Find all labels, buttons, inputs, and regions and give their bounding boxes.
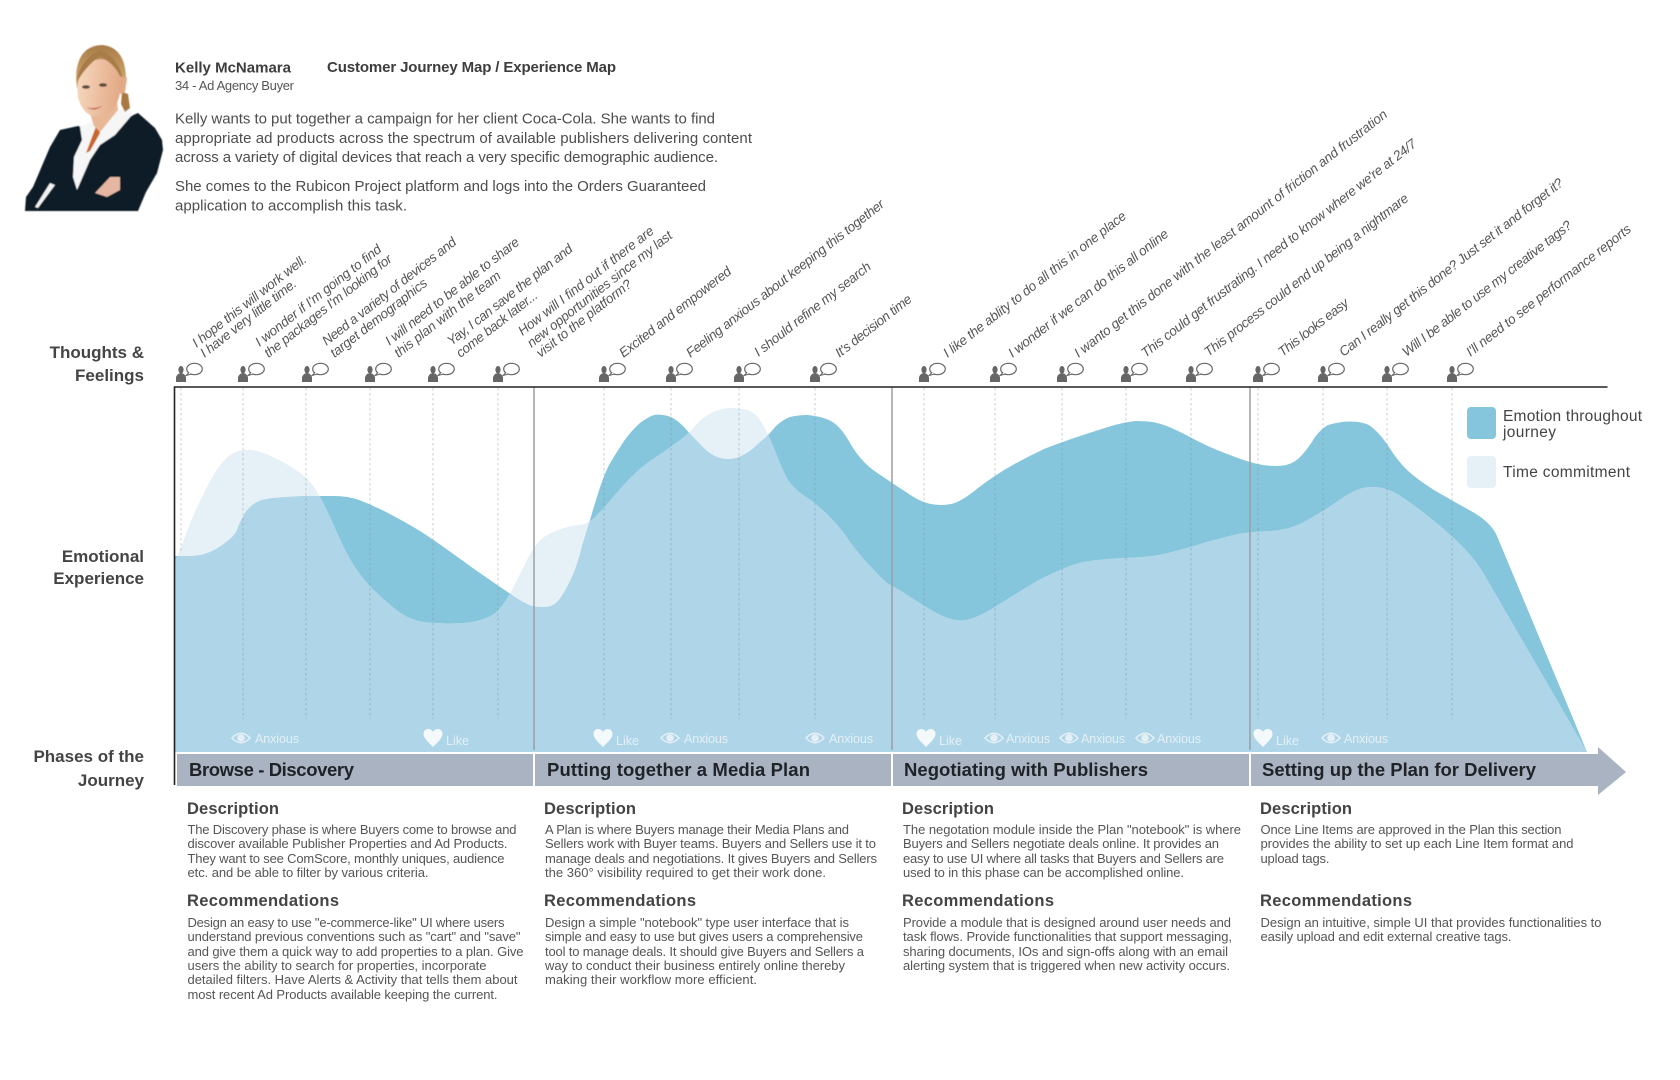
thoughts: rotated quotes [189,107,1634,360]
panel: delivery details: Description [1260,800,1352,818]
panel: browse details: Description [187,800,279,818]
panel: delivery details: provides the ability to set up each Line Item format and [1260,836,1574,851]
panel: media plan details: Recommendations [544,892,696,910]
panel: negotiating details: used to in this phase can be accomplished online. [903,865,1184,880]
area: overlap of emotion and time [174,415,1587,752]
row label: phases of the journey: Phases of the [33,747,144,766]
panel: media plan details: A Plan is where Buyers manage their Media Plans and [545,822,849,837]
feeling markers: Like [616,734,639,748]
thoughts: rotated quotes: I should refine my search [751,259,874,359]
thoughts: rotated quotes: I have very little time. [197,276,299,360]
phase label: browse: Browse - Discovery [189,759,355,780]
panel: browse details: detailed filters. Have Alerts & Activity that tells them about [188,972,518,987]
panel: negotiating details: Provide a module that is designed around user needs and [903,915,1231,930]
persona description: She comes to the Rubicon Project platform and logs into the Orders Guaranteed [175,178,706,195]
thoughts: rotated quotes: Will I be able to use my creative tags? [1399,217,1575,359]
feeling markers: Like [939,734,962,748]
feeling markers [232,729,1388,748]
phase label: delivery: Setting up the Plan for Delivery [1262,759,1537,780]
panel: media plan details [544,800,878,987]
panel: delivery details: Once Line Items are approved in the Plan this section [1260,822,1562,837]
panel: media plan details: Design a simple "notebook" type user interface that is [545,915,850,930]
panel: media plan details: tool to manage deals. It should give Buyers and Sellers a [545,944,865,959]
phase label: media plan: Putting together a Media Plan [547,759,810,780]
panel: browse details: understand previous conventions such as "cart" and "save" [188,929,521,944]
thoughts: rotated quotes: Feeling anxious about keeping this together [683,196,887,360]
panel: negotiating details: Recommendations [902,892,1054,910]
persona heading: 34 - Ad Agency Buyer [175,78,295,93]
persona description: across a variety of digital devices that reach a very specific demographic audience. [175,149,718,166]
thoughts: rotated quotes: visit to the platform? [533,276,635,360]
thoughts: rotated quotes: Need a variety of devices and [319,234,460,348]
panel: browse details: Recommendations [187,892,339,910]
panel: negotiating details: alerting system that is triggered when new activity occurs. [903,958,1230,973]
panel: negotiating details: Description [902,800,994,818]
panel: browse details: Design an easy to use "e-commerce-like" UI where users [188,915,505,930]
thoughts: rotated quotes: Can I really get this done? Just set it and forget it? [1336,175,1566,359]
row label: thoughts and feelings: Feelings [75,366,144,385]
thoughts: rotated quotes: target demographics [327,275,430,360]
panel: negotiating details: The negotation module inside the Plan "notebook" is where [903,822,1241,837]
panel: negotiating details: sharing documents, IOs and sign-offs along with an email [903,944,1228,959]
persona description: Kelly wants to put together a campaign for her client Coca-Cola. She wants to find [175,110,715,128]
thoughts: rotated quotes: come back later... [453,288,540,360]
panel: media plan details: simple and easy to use but gives users a comprehensive [545,929,863,944]
panel: delivery details: upload tags. [1260,851,1330,866]
row label: thoughts and feelings: Thoughts & [50,343,144,362]
phase label: negotiating: Negotiating with Publishers [904,759,1148,780]
panel: browse details: users the ability to search for properties, incorporate [188,958,486,973]
thoughts: rotated quotes: I will need to be able to share [382,234,522,348]
legend: Emotion throughout [1503,408,1643,425]
persona heading: Kelly McNamara [175,60,292,76]
panel: negotiating details: task flows. Provide functionalities that support messaging, [903,929,1232,944]
row label: emotional experience: Emotional [62,547,144,566]
panel: media plan details: the 360° visibility required to get their work done. [545,865,826,880]
row label: phases of the journey [33,747,145,790]
panel: negotiating details [902,800,1241,973]
panel: delivery details: easily upload and edit external creative tags. [1260,929,1512,944]
feeling markers: Like [446,734,469,748]
icons: person with speech bubble [176,363,1473,382]
legend: Time commitment [1503,464,1631,481]
panel: browse details: The Discovery phase is where Buyers come to browse and [188,822,516,837]
row label: emotional experience: Experience [53,569,144,588]
feeling markers: Anxious [255,732,299,746]
thoughts: rotated quotes: this plan with the team [391,268,504,360]
panel: browse details: most recent Ad Products available keeping the current. [188,987,498,1002]
row label: phases of the journey: Journey [78,771,145,790]
thoughts: rotated quotes: I wonder if I'm going to find [252,241,385,349]
panel: browse details: and give them a quick way to add properties to a plan. Give [188,944,524,959]
thoughts: rotated quotes: This process could end up being a nightmare [1201,191,1411,359]
panel: media plan details: manage deals and negotiations. It gives Buyers and Sellers [545,851,878,866]
arrow: phases band [177,747,1626,795]
feeling markers: Anxious [1081,732,1125,746]
thoughts: rotated quotes: I like the ablity to do all this in one place [940,208,1129,360]
panel: negotiating details: easy to use UI where all tasks that Buyers and Sellers are [903,851,1224,866]
title: Customer Journey Map / Experience Map [327,59,616,76]
row label: thoughts and feelings [50,343,144,385]
thoughts: rotated quotes: This could get frustrating. I need to know where we're at 24/7 [1138,136,1420,360]
legend: journey [1502,424,1556,441]
persona description: appropriate ad products across the spectrum of available publishers delivering content [175,130,753,147]
feeling markers: Anxious [1006,732,1050,746]
panel: negotiating details: Buyers and Sellers negotiate deals online. It provides an [903,836,1219,851]
thoughts: rotated quotes: I hope this will work well. [189,252,309,350]
icon: portrait of Kelly [25,45,163,211]
feeling markers: Anxious [684,732,728,746]
thoughts: rotated quotes: It's decision time [832,291,915,360]
thoughts: rotated quotes: I wonder if we can do this all online [1005,226,1171,360]
panel: browse details: They want to see ComScore, monthly uniques, audience [188,851,504,866]
panel: browse details [187,800,524,1002]
area: emotion throughout journey [174,415,1587,752]
thoughts: rotated quotes: How will I find out if there are [515,223,657,338]
panel: media plan details: way to conduct their business entirely online thereby [544,958,846,973]
thoughts: rotated quotes: I'll need to see performance reports [1463,221,1634,359]
panel: delivery details [1260,800,1602,944]
panel: browse details: discover available Publisher Properties and Ad Products. [188,836,508,851]
thoughts: rotated quotes: new opportunities since my last [524,227,676,350]
panel: delivery details: Design an intuitive, simple UI that provides functionalities to [1260,915,1602,930]
feeling markers: Like [1276,734,1299,748]
persona description: application to accomplish this task. [175,198,407,214]
thoughts: rotated quotes: Excited and empowered [616,263,735,360]
thoughts: rotated quotes: This looks easy [1275,294,1352,359]
persona heading [175,60,295,93]
thoughts: rotated quotes: Yay, I can save the plan and [444,241,576,348]
chart: emotion and time commitment areas [174,408,1587,752]
persona description [175,110,753,214]
panel: delivery details: Recommendations [1260,892,1412,910]
thoughts: rotated quotes: I wanto get this done with the least amount of friction and frustration [1071,107,1390,360]
panel: media plan details: Description [544,800,636,818]
feeling markers: Anxious [1344,732,1388,746]
panel: media plan details: Sellers work with Buyer teams. Buyers and Sellers use it to [545,836,876,851]
feeling markers: Anxious [1157,732,1201,746]
row label: emotional experience [53,547,144,588]
area: time commitment [174,408,1587,752]
legend [1467,407,1643,488]
thoughts: rotated quotes: the packages I'm looking for [261,251,395,360]
panel: browse details: etc. and be able to filter by various criteria. [188,865,428,880]
panel: media plan details: making their workflow more efficient. [545,972,757,987]
feeling markers: Anxious [829,732,873,746]
